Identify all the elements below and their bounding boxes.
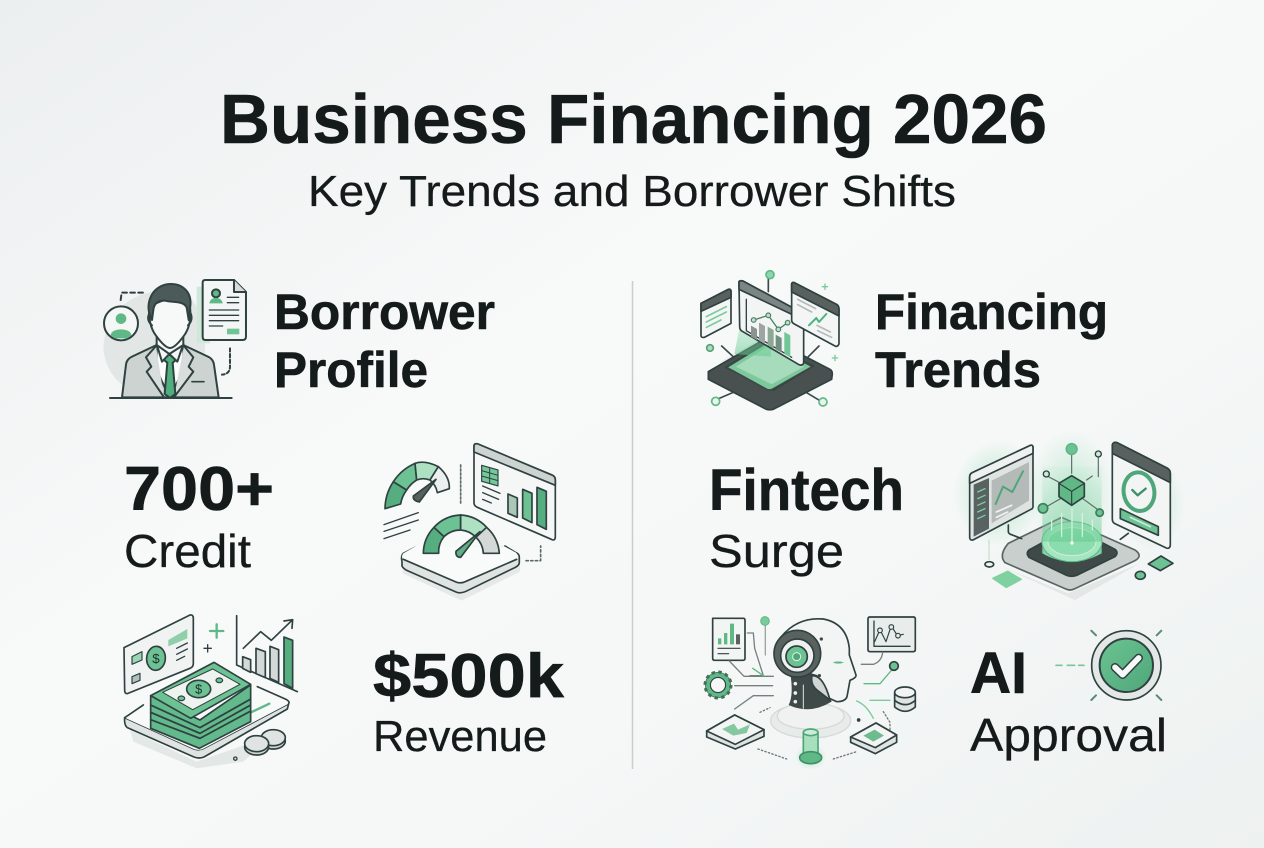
stat: $500k revenue: Revenue [373,712,547,761]
center divider [632,281,634,769]
stat: Fintech Surge: Fintech [709,458,904,523]
panel: borrower profile [103,280,565,768]
heading: Borrower Profile: Borrower [274,284,495,340]
stat: AI Approval [970,641,1167,761]
icon: AI robot head [705,617,915,770]
panel: financing trends [701,271,1185,770]
stat: 700+ credit [124,455,274,577]
icon: cash stack and growth chart [124,615,297,768]
icon: credit gauges [384,444,555,601]
stat: $500k revenue [373,642,565,761]
heading: Financing Trends: Financing [875,284,1108,340]
icon: businessman with resume [103,280,246,398]
heading: Borrower Profile: Profile [274,342,428,398]
stat: Fintech Surge [709,458,904,577]
icon: dashboard platform [701,271,839,410]
stat: 700+ credit: Credit [124,525,251,577]
stat: $500k revenue: $500k [373,642,565,711]
title: Business Financing 2026 [220,80,1047,158]
icon: approval check badge [1056,631,1161,700]
subtitle: Key Trends and Borrower Shifts [308,167,956,216]
stat: AI Approval: AI [970,641,1027,706]
icon: cash stack and growth chart: $ [195,683,202,697]
heading: Financing Trends: Trends [875,342,1041,398]
stat: Fintech Surge: Surge [709,525,844,577]
heading: Borrower Profile [274,284,495,398]
icon: fintech hologram platform [953,430,1185,600]
heading: Financing Trends [875,284,1108,398]
stat: 700+ credit: 700+ [124,455,274,524]
icon: cash stack and growth chart: $ [152,651,160,666]
stat: AI Approval: Approval [970,709,1167,761]
